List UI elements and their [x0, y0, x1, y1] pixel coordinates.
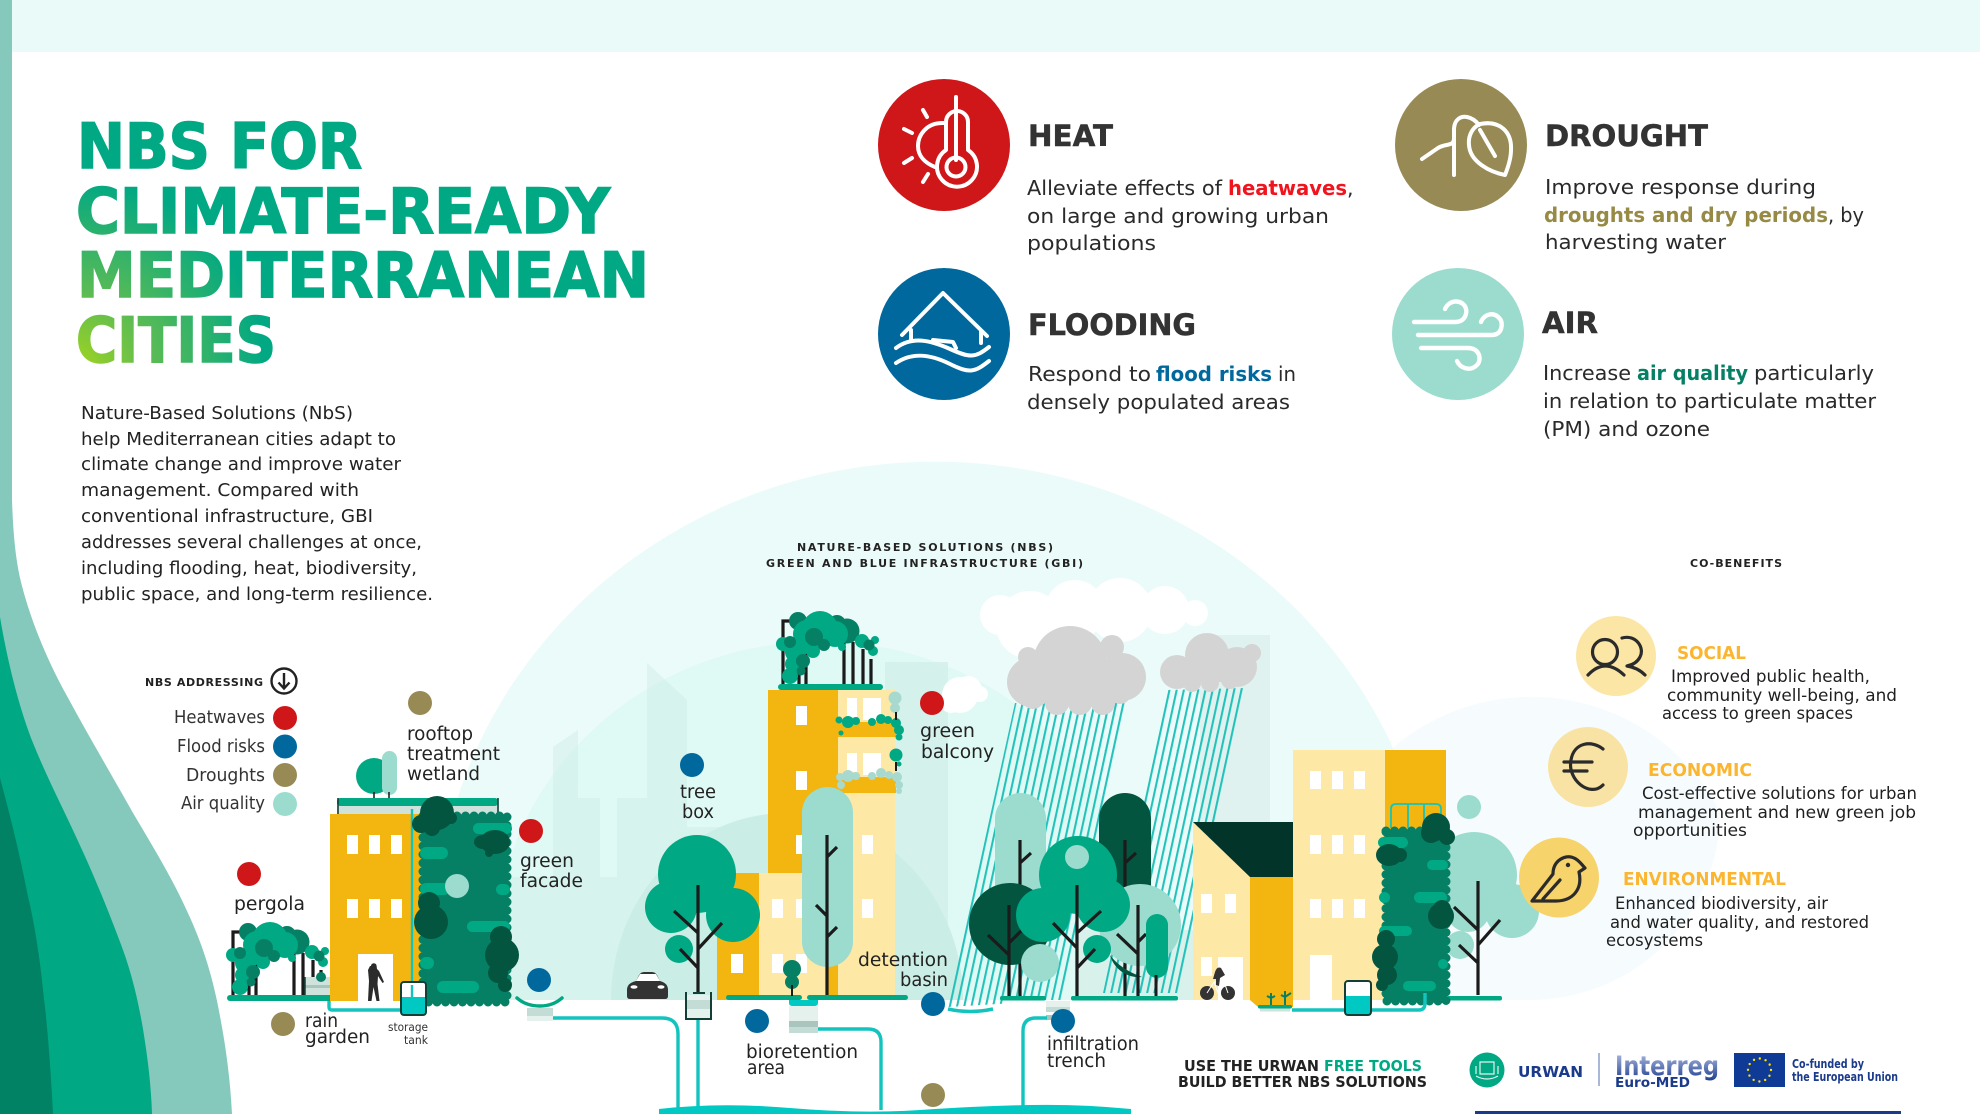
legend: NBS addressing: Flood risks [177, 737, 265, 757]
label: green balcony: green [920, 721, 975, 742]
NBS column heading: NATURE-BASED SOLUTIONS (NBS) [797, 541, 1053, 554]
panel: environmental co-benefit: ENVIRONMENTAL [1623, 869, 1786, 890]
panel: economic co-benefit: ECONOMIC [1648, 760, 1752, 781]
call to action: USE THE URWAN [1184, 1057, 1319, 1075]
icon: down arrow [272, 668, 296, 694]
icon: car [627, 972, 668, 999]
right building [1293, 750, 1446, 1000]
drought description: Improve response during [1545, 175, 1816, 199]
logo: URWAN: URWAN [1518, 1063, 1583, 1081]
logo: EU flag [1734, 1053, 1785, 1087]
pergola [226, 922, 349, 1001]
environmental description: and water quality, and restored [1610, 913, 1869, 932]
air description: air quality [1637, 361, 1748, 385]
social description [1662, 667, 1897, 723]
rain cloud right rain [1103, 688, 1245, 993]
label: storage tank: storage [388, 1020, 428, 1034]
title: CLIMATE-READY [76, 175, 611, 248]
call to action [1178, 1057, 1427, 1091]
bottom rule [1475, 1111, 1901, 1114]
white clouds [940, 578, 1208, 713]
label: rain garden: garden [305, 1027, 370, 1048]
green balconies [836, 692, 904, 794]
co-funded text: Co-funded by [1792, 1057, 1864, 1071]
icon: flooded house [878, 268, 1010, 400]
label: bioretention area: bioretention [746, 1042, 858, 1063]
social description: Improved public health, [1671, 667, 1870, 686]
co-funded text [1792, 1057, 1898, 1084]
infiltration trench: trench [1047, 1051, 1106, 1072]
panel: air: AIR [1542, 306, 1598, 340]
label: green facade: green [520, 851, 574, 872]
infiltration trench: infiltration [1047, 1034, 1139, 1055]
bioswale and pipe [517, 998, 678, 1110]
icon: cyclist [1200, 968, 1235, 1000]
label: pergola [234, 862, 305, 915]
panel: drought [1395, 79, 1864, 254]
label: detention basin: basin [900, 970, 948, 991]
green facade right [1372, 813, 1455, 1001]
social description: community well-being, and [1667, 686, 1897, 705]
icon: euro [1548, 727, 1628, 807]
label: green facade: facade [520, 871, 583, 892]
label: rain garden: rain [305, 1011, 338, 1032]
labels: left building: rooftop [407, 724, 473, 745]
rooftop pergola [776, 611, 879, 684]
person silhouette [368, 963, 384, 1001]
top band [12, 0, 1980, 52]
logo: URWAN [1470, 1052, 1583, 1088]
labels: left building [407, 691, 500, 785]
label: pergola: pergola [234, 894, 305, 915]
air description: particularly [1754, 361, 1874, 385]
call to action: BUILD BETTER NBS SOLUTIONS [1178, 1073, 1427, 1091]
logos [1470, 1051, 1898, 1091]
heat description: , [1347, 176, 1354, 200]
logo: Interreg Euro-MED [1615, 1051, 1719, 1091]
intro paragraph: help Mediterranean cities adapt to [81, 430, 396, 450]
infiltration trench [1023, 1001, 1139, 1110]
legend: NBS addressing: Heatwaves [174, 708, 265, 728]
tree cluster [969, 793, 1181, 1000]
flooding description: flood risks [1156, 362, 1272, 386]
label: rain garden [271, 1011, 370, 1048]
co-funded text: the European Union [1792, 1070, 1898, 1084]
labels: centre: tree [680, 782, 716, 803]
intro paragraph [81, 404, 433, 605]
label: green facade [519, 819, 583, 892]
panel: air [1392, 268, 1877, 441]
marker: groundwater drought [921, 1083, 945, 1107]
co-benefits heading: CO-BENEFITS [1690, 557, 1782, 570]
label: green balcony [920, 691, 994, 763]
heat description [1027, 176, 1354, 255]
heat description: heatwaves [1228, 176, 1347, 200]
groundwater [659, 1105, 1131, 1114]
NBS column heading [766, 541, 1083, 570]
panel: heat: HEAT [1028, 119, 1113, 153]
title: MEDITERRANEAN [77, 239, 649, 312]
small house [1193, 822, 1293, 1007]
environmental description [1606, 894, 1869, 950]
NBS column heading: GREEN AND BLUE INFRASTRUCTURE (GBI) [766, 557, 1083, 570]
panel: economic co-benefit [1548, 727, 1917, 840]
panel: social co-benefit: SOCIAL [1677, 643, 1746, 664]
storage tank right and pipe [1292, 981, 1425, 1015]
economic description [1633, 784, 1917, 840]
heat description: populations [1027, 231, 1156, 255]
legend: NBS addressing: Air quality [181, 794, 265, 814]
drought description: , by [1828, 203, 1864, 227]
environmental description: ecosystems [1606, 931, 1703, 950]
panel: flooding [878, 268, 1296, 414]
air description: (PM) and ozone [1543, 417, 1710, 441]
logo: Interreg Euro-MED: Euro-MED [1615, 1075, 1690, 1091]
label: bioretention area [745, 1009, 858, 1079]
intro paragraph: conventional infrastructure, GBI [81, 507, 373, 527]
grey rain clouds [1007, 626, 1261, 715]
label: bioretention area: area [747, 1058, 785, 1079]
panel: heat [878, 79, 1354, 255]
flooding description: densely populated areas [1027, 390, 1290, 414]
central tall building [717, 684, 904, 1000]
labels: centre: box [682, 802, 714, 823]
air description: Increase [1543, 361, 1631, 385]
storage tank left and pipe [329, 982, 426, 1015]
left wave: green [0, 617, 152, 1114]
icon: wind [1392, 268, 1524, 400]
left wave: teal [0, 0, 232, 1114]
icon: bird [1519, 838, 1599, 918]
logo: Interreg Euro-MED: Interreg [1615, 1051, 1719, 1082]
title: NBS FOR [77, 110, 362, 183]
intro paragraph: Nature-Based Solutions (NbS) [81, 404, 353, 424]
left orange building [330, 814, 422, 1001]
flooding description: in [1278, 362, 1296, 386]
ground [190, 1000, 1980, 1114]
title: CITIES [76, 304, 276, 377]
label: storage tank: tank [404, 1033, 428, 1047]
legend: NBS addressing: NBS ADDRESSING [145, 676, 263, 689]
legend: NBS addressing: Droughts [186, 766, 265, 786]
panel: drought: DROUGHT [1545, 119, 1708, 153]
label: detention basin: detention [858, 950, 948, 971]
intro paragraph: addresses several challenges at once, [81, 533, 422, 553]
labels: centre [680, 753, 716, 823]
air description [1543, 361, 1877, 441]
economic description: Cost-effective solutions for urban [1642, 784, 1917, 803]
intro paragraph: management. Compared with [81, 481, 359, 501]
marker: bioswale [527, 968, 551, 992]
economic description: opportunities [1633, 821, 1747, 840]
tree box tree [645, 835, 760, 1110]
title [76, 110, 649, 377]
heat description: on large and growing urban [1027, 204, 1329, 228]
call to action: FREE TOOLS [1324, 1057, 1422, 1075]
rooftop treatment wetland [337, 751, 498, 814]
flooding description [1027, 362, 1296, 414]
background domes and skyline [435, 462, 1720, 1000]
label: detention basin [858, 950, 948, 1016]
labels: left building: treatment [407, 744, 500, 765]
tall pale tree [802, 787, 853, 997]
detention basin water [948, 1009, 993, 1012]
panel: environmental co-benefit [1519, 838, 1869, 950]
left wave: dark green [0, 778, 53, 1114]
intro paragraph: including flooding, heat, biodiversity, [81, 559, 417, 579]
planter [305, 972, 337, 995]
rain garden sprouts [1258, 991, 1292, 1012]
environmental description: Enhanced biodiversity, air [1615, 894, 1828, 913]
flooding description: Respond to [1028, 362, 1151, 386]
panel: social co-benefit [1576, 616, 1897, 723]
intro paragraph: public space, and long-term resilience. [81, 585, 433, 605]
labels: left building: wetland [407, 764, 480, 785]
bioretention area [726, 960, 908, 1110]
heat description: Alleviate effects of [1027, 176, 1223, 200]
right tree [1431, 795, 1539, 1000]
social description: access to green spaces [1662, 704, 1853, 723]
green facade left [412, 796, 519, 1002]
icon: heat thermometer and sun [878, 79, 1010, 211]
icon: people [1576, 616, 1656, 696]
panel: flooding: FLOODING [1028, 308, 1196, 342]
drought description: droughts and dry periods [1544, 203, 1828, 227]
tree box [686, 992, 711, 1019]
intro paragraph: climate change and improve water [81, 455, 402, 475]
legend: NBS addressing [145, 668, 297, 816]
label: green balcony: balcony [921, 742, 994, 763]
label: storage tank [388, 1020, 428, 1047]
drought description: harvesting water [1545, 230, 1727, 254]
rain cloud left rain [948, 700, 1130, 1007]
icon: drought leaf [1395, 79, 1527, 211]
drought description [1544, 175, 1864, 254]
air description: in relation to particulate matter [1543, 389, 1877, 413]
economic description: management and new green job [1638, 803, 1916, 822]
